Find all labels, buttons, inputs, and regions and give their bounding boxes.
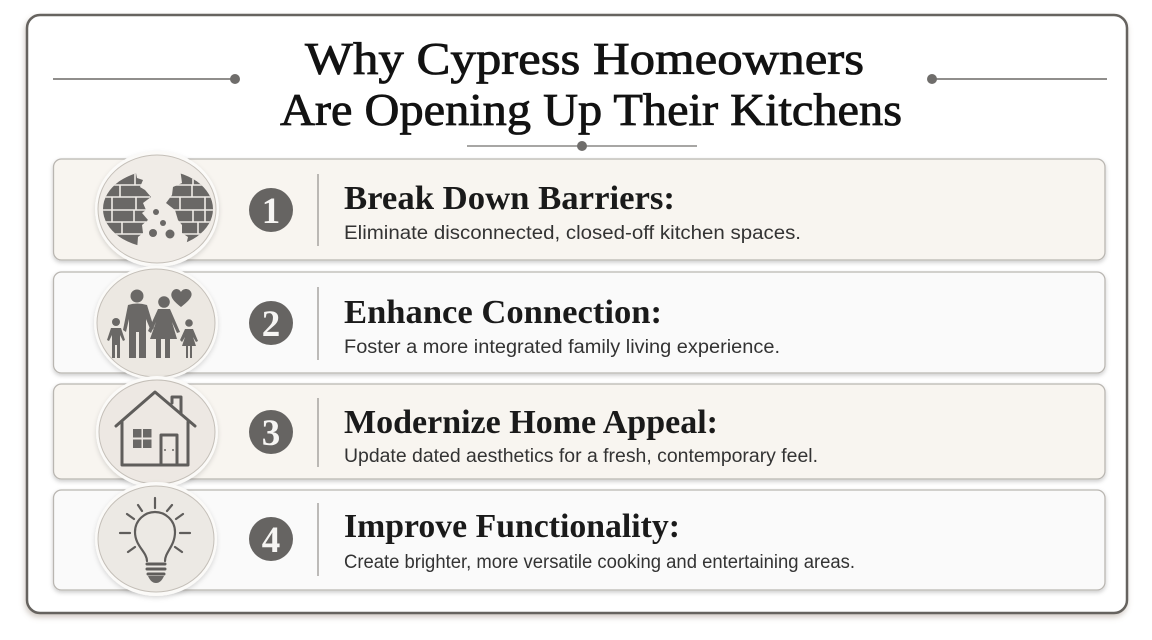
- title: Why Cypress Homeowners: [305, 33, 864, 84]
- heading 1: Break Down Barriers:: [344, 180, 675, 217]
- title: [280, 33, 902, 135]
- title: Are Opening Up Their Kitchens: [280, 84, 902, 135]
- panel: row 4 improve functionality: [54, 482, 1105, 596]
- heading 3: Modernize Home Appeal:: [344, 404, 718, 441]
- heading 4: Improve Functionality:: [344, 508, 680, 545]
- number badge 2: [249, 301, 293, 345]
- description 3: Update dated aesthetics for a fresh, contemporary feel.: [344, 446, 818, 467]
- description 4: Create brighter, more versatile cooking and entertaining areas.: [344, 552, 855, 573]
- panel: row 3 modernize home appeal: [54, 376, 1105, 488]
- number badge 1: [249, 188, 293, 232]
- circle icon: light bulb: [95, 482, 217, 596]
- number badge 3: [249, 410, 293, 454]
- panel: row 1 break down barriers: [54, 151, 1105, 267]
- description 1: Eliminate disconnected, closed-off kitchen spaces.: [344, 223, 801, 244]
- panel: row 2 enhance connection: [54, 266, 1105, 380]
- title underline ornament: [467, 141, 697, 151]
- left title ornament: [53, 74, 240, 84]
- number badge 4: 4: [262, 520, 280, 561]
- circle icon: house: [96, 376, 218, 488]
- number badge 3: 3: [262, 413, 280, 454]
- number badge 1: 1: [262, 191, 280, 232]
- right title ornament: [927, 74, 1107, 84]
- number badge 4: [249, 517, 293, 561]
- description 2: Foster a more integrated family living experience.: [344, 337, 780, 358]
- heading 2: Enhance Connection:: [344, 294, 662, 331]
- circle icon: family with heart: [94, 266, 218, 380]
- circle icon: crumbling brick wall: [95, 151, 219, 267]
- number badge 2: 2: [262, 304, 280, 345]
